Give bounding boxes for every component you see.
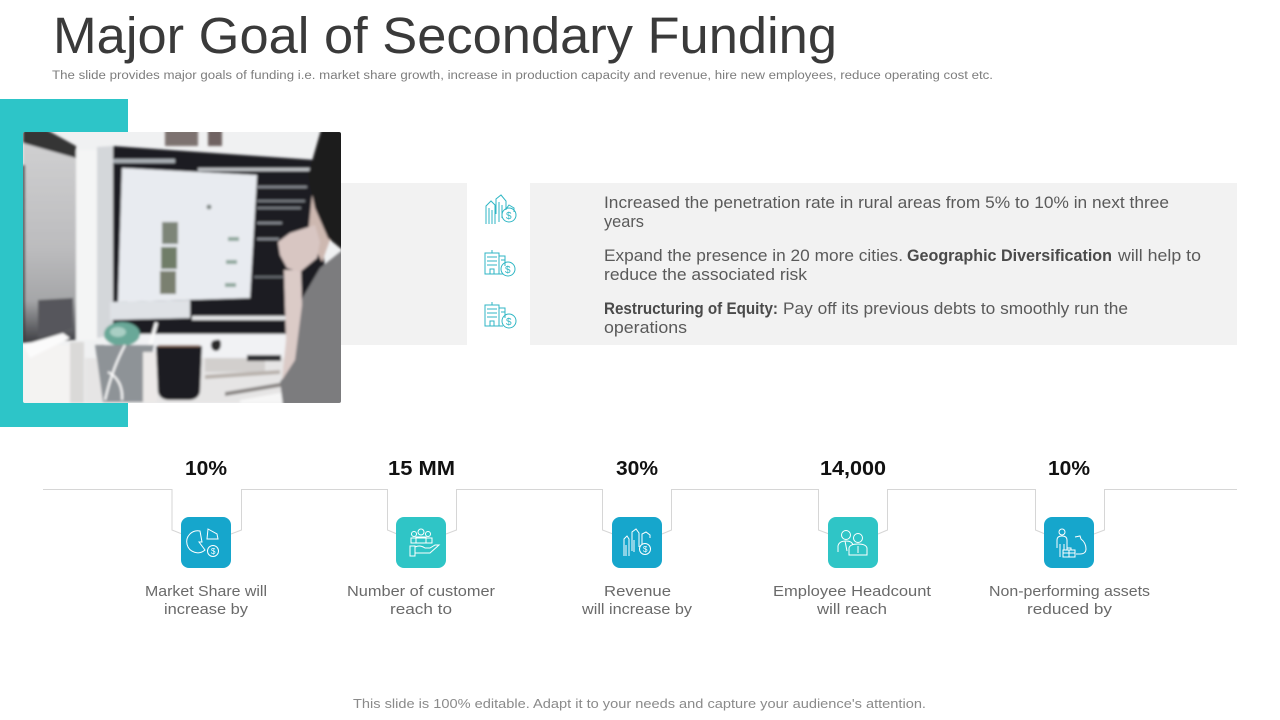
- connector line: [43, 490, 1237, 534]
- monitor chin: [105, 334, 290, 358]
- goal text 2: Expand the presence in 20 more cities.: [604, 247, 903, 265]
- desk: [86, 358, 283, 402]
- icon: office building with dollar 2: [485, 302, 516, 328]
- label: reduced by: [1027, 601, 1113, 618]
- value: 14,000: [820, 458, 886, 480]
- icon: office building with dollar 2: $: [506, 317, 512, 328]
- stat 1: market share: [145, 458, 267, 618]
- person: shirt: [280, 248, 345, 405]
- goal text 3: operations: [604, 319, 687, 337]
- teal accent block: [0, 99, 128, 427]
- stat 3: revenue: [581, 458, 693, 618]
- goal text 2: [604, 247, 1201, 284]
- stat 2: customer reach: [347, 458, 495, 618]
- person: hand: [278, 225, 320, 272]
- icon: pie chart with dollar: $: [211, 547, 216, 556]
- goal text 2: Geographic Diversification: [907, 247, 1112, 265]
- label: increase by: [164, 601, 249, 618]
- icon: buildings with dollar: [612, 517, 662, 568]
- goal text 1: [604, 194, 1169, 231]
- goal text 3: [604, 300, 1128, 337]
- label: Number of customer: [347, 583, 495, 600]
- background details: [165, 130, 198, 146]
- label: [347, 583, 495, 618]
- icon: pie chart with dollar: [181, 517, 231, 568]
- icon: office building with dollar 1: [485, 250, 515, 276]
- person: hair: [308, 132, 341, 251]
- papers on left: [23, 402, 25, 403]
- goal text 1: years: [604, 213, 644, 231]
- value: 10%: [185, 458, 227, 480]
- icon: buildings with dollar: $: [643, 545, 648, 554]
- mug: [156, 346, 202, 400]
- label: will increase by: [581, 601, 693, 618]
- grey panel: goals text: [530, 183, 1237, 345]
- label: Employee Headcount: [773, 583, 932, 600]
- value: 10%: [1048, 458, 1090, 480]
- footer note: This slide is 100% editable. Adapt it to your needs and capture your audience's attention.: [353, 697, 926, 711]
- title: Major Goal of Secondary Funding: [53, 7, 837, 64]
- label: [581, 583, 693, 618]
- label: [145, 583, 267, 618]
- label: [773, 583, 932, 618]
- goal text 2: reduce the associated risk: [604, 266, 808, 284]
- label: reach to: [390, 601, 452, 618]
- label: Non-performing assets: [989, 583, 1150, 600]
- icon: office building with dollar 1: $: [505, 265, 511, 276]
- value: 30%: [616, 458, 658, 480]
- icon: people in a hand: [396, 517, 446, 568]
- value: 15 MM: [388, 458, 455, 480]
- goal text 3: Pay off its previous debts to smoothly run the: [783, 300, 1128, 318]
- icon: two employees: [828, 517, 878, 568]
- person: face: [308, 195, 330, 262]
- goal text 1: Increased the penetration rate in rural areas from 5% to 10% in next three: [604, 194, 1169, 212]
- label: [989, 583, 1150, 618]
- main monitor: [97, 146, 113, 338]
- goal text 2: will help to: [1117, 247, 1201, 265]
- icon: city buildings with dollar: [486, 195, 516, 224]
- label: Market Share will: [145, 583, 267, 600]
- goal text 3: Restructuring of Equity:: [604, 300, 778, 318]
- icon: person with money bag and briefcase: [1044, 517, 1094, 568]
- subtitle: The slide provides major goals of funding i.e. market share growth, increase in production capacity and revenue, hire new employees, reduce operating cost etc.: [52, 70, 993, 82]
- stat 4: employee headcount: [773, 458, 932, 618]
- left monitor: [23, 130, 76, 343]
- plant and pot: [104, 322, 140, 346]
- person: arm: [282, 270, 302, 380]
- stat 5: non-performing assets: [989, 458, 1150, 618]
- grey panel: goals left segment: [341, 183, 467, 345]
- icon: city buildings with dollar: $: [506, 211, 512, 222]
- photo: person at a computer: [22, 130, 345, 405]
- label: will reach: [816, 601, 887, 618]
- label: Revenue: [604, 583, 671, 600]
